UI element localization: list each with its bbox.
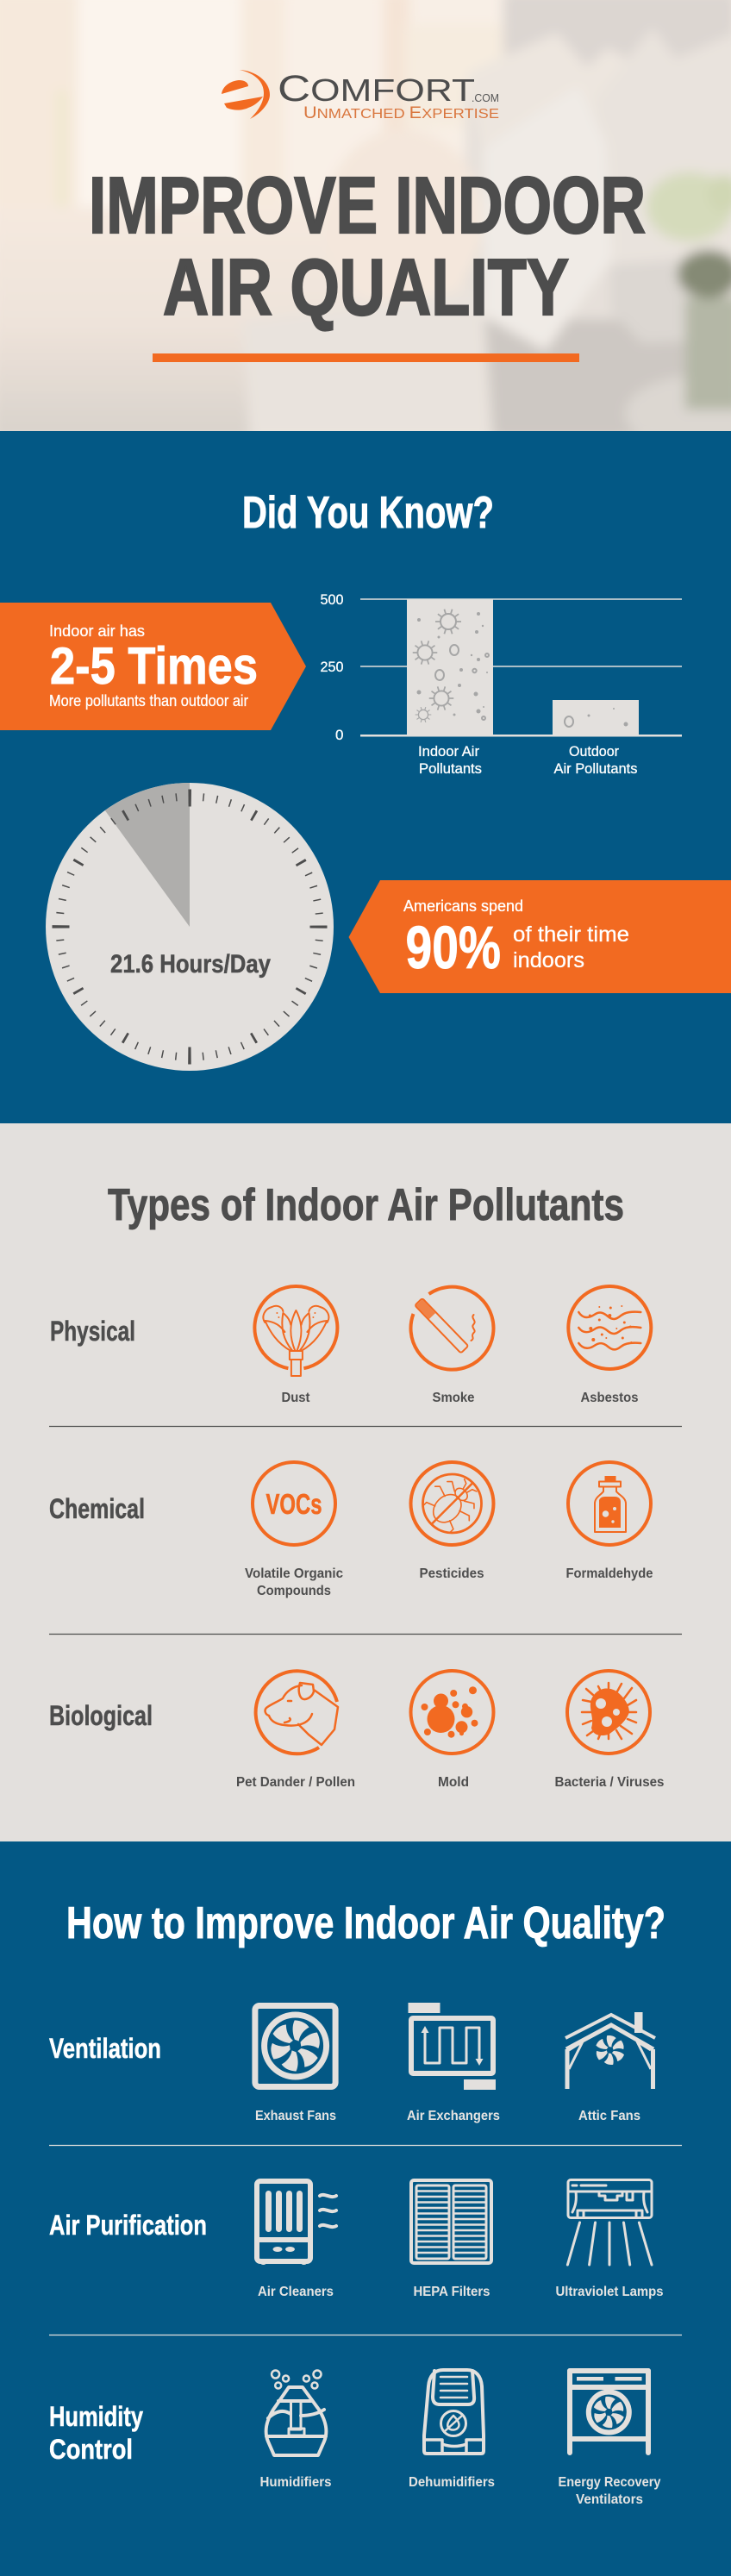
label: volatile organic compounds xyxy=(245,1566,343,1598)
y axis labels: 250 xyxy=(321,659,343,675)
label: air cleaners: Air Cleaners xyxy=(258,2285,334,2299)
callout: 2-5 times xyxy=(0,603,306,730)
icon: attic fan xyxy=(565,2012,655,2089)
label: volatile organic compounds: Compounds xyxy=(257,1584,331,1598)
label: energy recovery ventilators: Ventilators xyxy=(576,2492,643,2507)
row label: humidity control xyxy=(49,2401,143,2465)
callout: 90 percent indoors: Americans spend xyxy=(403,897,523,915)
callout: 2-5 times: More pollutants than outdoor air xyxy=(49,692,248,710)
label: formaldehyde: Formaldehyde xyxy=(565,1566,653,1581)
icon: dehumidifier xyxy=(424,2370,484,2454)
label: dehumidifiers: Dehumidifiers xyxy=(409,2475,495,2490)
chart gridlines xyxy=(360,599,682,666)
bar label: indoor: Indoor Air xyxy=(418,743,479,760)
icon: bacteria xyxy=(567,1671,650,1754)
logo wordmark: COMFORT xyxy=(278,68,475,109)
callout: 2-5 times: 2-5 Times xyxy=(50,637,258,695)
row label: air purification: Air Purification xyxy=(49,2210,207,2241)
row label: humidity control: Control xyxy=(49,2434,133,2465)
label: bacteria viruses: Bacteria / Viruses xyxy=(555,1775,664,1790)
bar label: outdoor: Outdoor xyxy=(569,743,619,760)
panel: did you know xyxy=(0,431,731,1123)
y axis labels xyxy=(321,591,343,743)
label: asbestos: Asbestos xyxy=(581,1391,638,1405)
heading: types of pollutants: Types of Indoor Air Pollutants xyxy=(108,1180,624,1230)
title xyxy=(89,160,646,332)
label: air exchangers: Air Exchangers xyxy=(407,2109,500,2123)
title underline xyxy=(153,353,579,362)
label: energy recovery ventilators xyxy=(559,2475,661,2507)
logo domain suffix: .COM xyxy=(472,91,499,104)
icon: exhaust fan xyxy=(255,2005,335,2086)
label: humidifiers: Humidifiers xyxy=(260,2475,331,2490)
icon: dust xyxy=(254,1286,337,1376)
title: AIR QUALITY xyxy=(163,242,569,332)
label: pet dander pollen: Pet Dander / Pollen xyxy=(236,1775,355,1790)
icon: ultraviolet lamp xyxy=(567,2179,652,2265)
icon: formaldehyde bottle xyxy=(568,1462,651,1545)
icon: humidifier xyxy=(266,2371,326,2455)
callout: 90 percent indoors: 90% xyxy=(405,914,501,981)
label: smoke: Smoke xyxy=(433,1391,475,1405)
panel: hero header xyxy=(0,0,731,453)
y axis labels: 500 xyxy=(321,591,343,608)
icon: smoke xyxy=(411,1287,494,1370)
bar label: outdoor: Air Pollutants xyxy=(553,760,638,777)
row label: humidity control: Humidity xyxy=(49,2401,143,2432)
icon: pesticides xyxy=(410,1462,493,1545)
bar label: outdoor xyxy=(553,743,638,777)
icon: mold xyxy=(410,1671,493,1754)
callout: 90 percent indoors: indoors xyxy=(513,948,584,972)
bar chart: indoor vs outdoor pollutants xyxy=(321,591,682,777)
y axis labels: 0 xyxy=(335,727,343,743)
chart baseline xyxy=(360,735,682,736)
icon: hepa filter xyxy=(411,2180,491,2263)
icon: e swirl xyxy=(222,70,270,119)
row label: chemical: Chemical xyxy=(49,1493,145,1524)
label: mold: Mold xyxy=(438,1775,469,1790)
logo tagline: UNMATCHED EXPERTISE xyxy=(303,104,499,122)
clock label: 21.6 Hours/Day xyxy=(110,950,271,979)
row label: ventilation: Ventilation xyxy=(49,2033,161,2064)
icon: VOCs: VOCs xyxy=(266,1488,322,1520)
clock wedge xyxy=(105,783,190,927)
icon: air exchanger xyxy=(409,2003,496,2090)
logo: eComfort.com xyxy=(222,68,499,122)
icon: asbestos xyxy=(568,1286,651,1369)
icon: pet dander xyxy=(256,1671,338,1754)
bar: indoor air pollutants xyxy=(407,599,493,735)
panel: how to improve xyxy=(0,1841,731,2576)
icon: air cleaner xyxy=(257,2181,336,2265)
label: energy recovery ventilators: Energy Recovery xyxy=(559,2475,661,2490)
callout: 2-5 times: Indoor air has xyxy=(49,622,145,640)
label: volatile organic compounds: Volatile Organic xyxy=(245,1566,343,1581)
icon: VOCs xyxy=(253,1462,335,1545)
bar label: indoor: Pollutants xyxy=(419,760,482,777)
label: hepa filters: HEPA Filters xyxy=(414,2285,490,2299)
icon: energy recovery ventilator xyxy=(570,2371,648,2453)
label: dust: Dust xyxy=(281,1391,310,1405)
callout: 90 percent indoors: of their time xyxy=(513,922,629,947)
label: pesticides: Pesticides xyxy=(419,1566,484,1581)
bar: outdoor air pollutants xyxy=(553,700,639,735)
bar label: indoor xyxy=(418,743,482,777)
panel: types of indoor air pollutants xyxy=(0,1123,731,1841)
clock chart: 21.6 hours per day xyxy=(46,783,334,1071)
callout: 90 percent indoors xyxy=(348,880,731,993)
row label: biological: Biological xyxy=(49,1700,153,1731)
background photo: bedroom xyxy=(0,0,731,453)
row label: physical: Physical xyxy=(50,1316,135,1347)
label: exhaust fans: Exhaust Fans xyxy=(255,2109,336,2123)
label: ultraviolet lamps: Ultraviolet Lamps xyxy=(555,2285,664,2299)
heading: did you know: Did You Know? xyxy=(242,488,494,538)
label: attic fans: Attic Fans xyxy=(578,2109,640,2123)
